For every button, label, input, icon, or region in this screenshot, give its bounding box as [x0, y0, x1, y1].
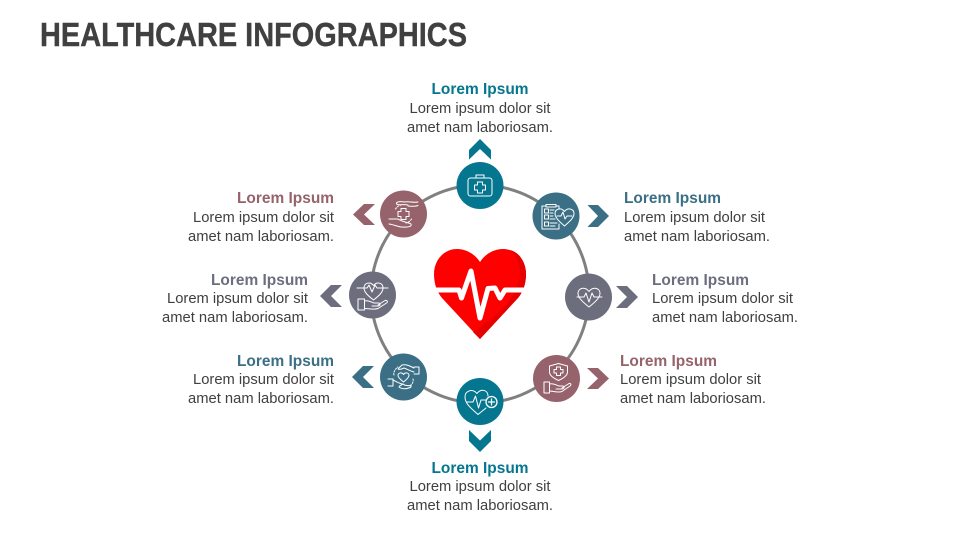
upper right text: Lorem ipsum dolor sit — [624, 210, 765, 226]
title: HEALTHCARE INFOGRAPHICS — [40, 16, 467, 53]
bottom text: Lorem Ipsum — [432, 460, 528, 477]
left text: Lorem ipsum dolor sit — [167, 291, 308, 307]
arrow: right — [616, 286, 638, 308]
arrow: up — [469, 139, 491, 160]
upper left text — [188, 190, 334, 245]
item: top — [407, 81, 553, 209]
icon: hands around heart — [380, 354, 427, 400]
right text: Lorem Ipsum — [652, 272, 749, 289]
lower left text: Lorem ipsum dolor sit — [193, 372, 334, 388]
item: upper right — [532, 190, 770, 245]
top text — [407, 81, 553, 136]
icon: heart with pulse — [565, 274, 612, 320]
upper right text — [624, 190, 770, 245]
top text: amet nam laboriosam. — [407, 120, 553, 136]
bottom text: amet nam laboriosam. — [407, 498, 553, 514]
arrow: left — [352, 366, 374, 388]
lower right text — [620, 353, 766, 407]
item: upper left — [188, 190, 427, 245]
arrow: left — [353, 204, 375, 225]
icon: heart with pulse and plus — [456, 378, 504, 425]
lower right text: Lorem Ipsum — [620, 353, 717, 370]
lower left text: Lorem Ipsum — [237, 353, 334, 370]
right text — [652, 272, 798, 326]
bottom text — [407, 460, 553, 514]
right text: amet nam laboriosam. — [652, 310, 798, 326]
icon: shield in hand — [533, 355, 580, 402]
upper right text: Lorem Ipsum — [624, 190, 721, 207]
arrow: right — [588, 205, 609, 227]
item: bottom — [407, 378, 553, 514]
upper left text: Lorem Ipsum — [237, 190, 334, 207]
item: left — [162, 272, 396, 326]
upper left text: amet nam laboriosam. — [188, 229, 334, 245]
lower right text: Lorem ipsum dolor sit — [620, 372, 761, 388]
lower left text: amet nam laboriosam. — [188, 391, 334, 407]
icon: heart above hand — [349, 272, 396, 318]
top text: Lorem ipsum dolor sit — [410, 101, 550, 117]
lower right text: amet nam laboriosam. — [620, 391, 766, 407]
arrow: down — [469, 430, 491, 452]
icon: hands around medical cross — [380, 190, 427, 238]
icon: clipboard with heart — [532, 192, 580, 240]
bottom text: Lorem ipsum dolor sit — [410, 479, 550, 495]
icon: first aid kit — [456, 162, 504, 209]
item: lower right — [533, 353, 766, 407]
upper left text: Lorem ipsum dolor sit — [193, 210, 334, 226]
top text: Lorem Ipsum — [432, 81, 528, 98]
right text: Lorem ipsum dolor sit — [652, 291, 793, 307]
arrow: right — [587, 368, 609, 389]
lower left text — [188, 353, 334, 407]
left text: amet nam laboriosam. — [162, 310, 308, 326]
ring connecting the icons — [371, 185, 589, 403]
item: lower left — [188, 353, 427, 407]
icon: central heart with pulse — [433, 249, 527, 339]
item: right — [565, 272, 798, 326]
arrow: left — [320, 285, 342, 307]
left text — [162, 272, 308, 326]
left text: Lorem Ipsum — [211, 272, 308, 289]
upper right text: amet nam laboriosam. — [624, 229, 770, 245]
